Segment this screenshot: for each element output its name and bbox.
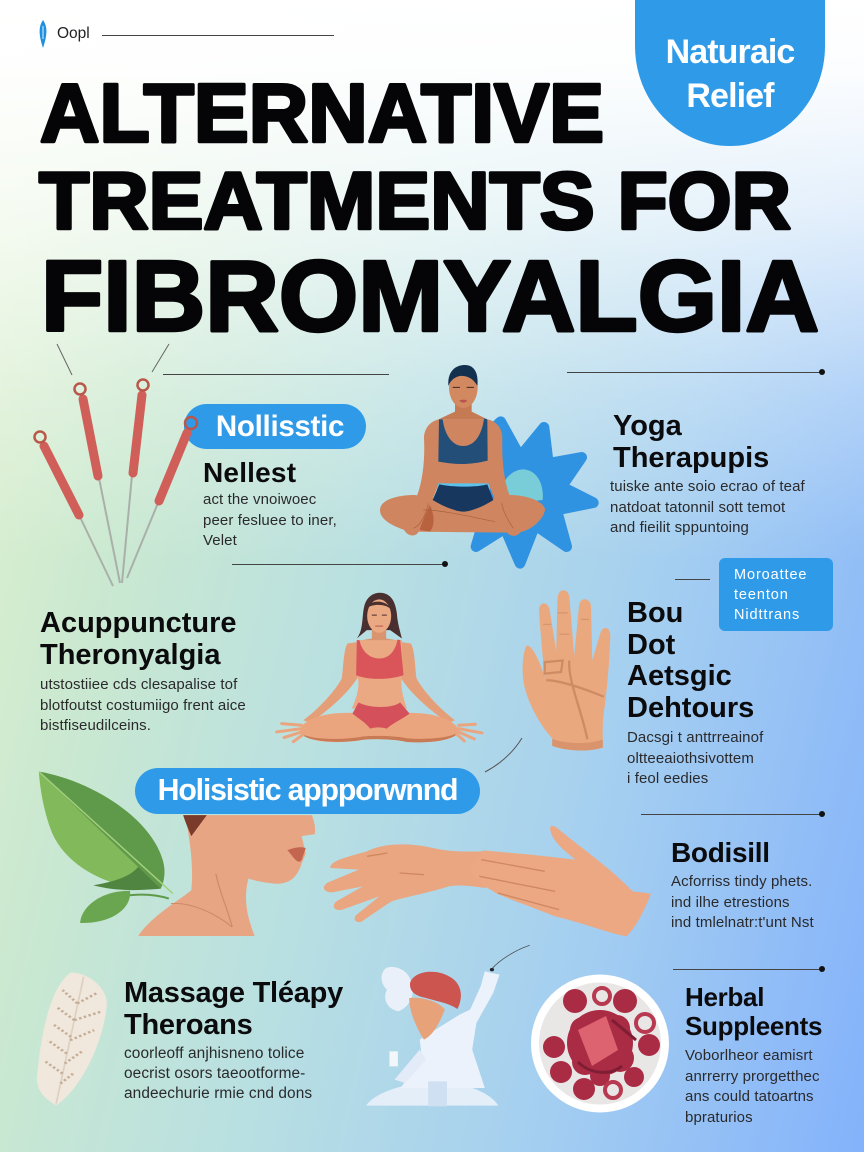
text: nellest: Nellest bbox=[203, 457, 296, 488]
text: bodisill: ind tmlelnatr:t'unt Nst bbox=[671, 914, 814, 931]
icon: textured herb leaf bbox=[36, 972, 107, 1106]
line from hand bbox=[484, 738, 522, 772]
text: acupuncture: blotfoutst costumiigo frent aice bbox=[40, 696, 246, 714]
title: TREATMENTS FOR bbox=[39, 156, 791, 246]
text: massage therapy: Theroans bbox=[124, 1009, 253, 1041]
text: acupuncture: Acuppuncture bbox=[40, 607, 237, 639]
text: herbal supplements: ans could tatoartns bbox=[685, 1088, 814, 1105]
pill: holistic: Nollisstic bbox=[216, 410, 344, 443]
pill: holistic approach bbox=[135, 768, 480, 814]
badge: natural relief: Naturaic bbox=[666, 33, 794, 71]
text: herbal supplements: anrrerry prorgetthec bbox=[685, 1068, 820, 1084]
text: yoga therapupis: and fieilit sppuntoing bbox=[610, 519, 749, 536]
text: nellest bbox=[203, 457, 337, 549]
text: bou dot: Dacsgi t anttrreainof bbox=[627, 729, 763, 746]
badge: natural relief: Relief bbox=[686, 77, 774, 115]
text: nellest: peer fesluee to iner, bbox=[203, 512, 337, 528]
text: yoga therapupis: natdoat tatonnil sott temot bbox=[610, 498, 785, 516]
text: herbal supplements: Voborlheor eamisrt bbox=[685, 1047, 813, 1064]
callout: moderate: Nidttrans bbox=[734, 607, 800, 623]
icon: yoga woman with blue burst bbox=[380, 365, 599, 569]
text: herbal supplements: Herbal bbox=[685, 982, 764, 1012]
text: acupuncture: Theronyalgia bbox=[40, 639, 220, 671]
text: acupuncture bbox=[40, 607, 246, 734]
text: massage therapy: coorleoff anjhisneno tolice bbox=[124, 1045, 304, 1062]
text: massage therapy: andeechurie rmie cnd dons bbox=[124, 1085, 312, 1102]
text: bodisill: Acforriss tindy phets. bbox=[671, 873, 812, 890]
text: bou dot: Bou bbox=[627, 597, 683, 629]
text: herbal supplements: bpraturios bbox=[685, 1108, 753, 1126]
callout: moderate: Moroattee bbox=[734, 567, 807, 583]
text: bou dot: Aetsgic bbox=[627, 660, 732, 692]
text: massage therapy: Massage Tléapy bbox=[124, 977, 343, 1009]
text: bodisill bbox=[671, 837, 814, 931]
text: bou dot: Dot bbox=[627, 628, 675, 660]
text: herbal supplements bbox=[685, 982, 822, 1126]
text: acupuncture: utstostiiee cds clesapalise tof bbox=[40, 676, 237, 693]
text: herbal supplements: Suppleents bbox=[685, 1011, 822, 1041]
title bbox=[38, 67, 819, 352]
title: ALTERNATIVE bbox=[40, 67, 604, 159]
text: yoga therapupis: Therapupis bbox=[613, 442, 769, 474]
icon: plate of herbal supplements bbox=[531, 974, 669, 1112]
icon: open hand bbox=[522, 590, 610, 750]
logo bbox=[40, 20, 90, 48]
pill: holistic approach: Holisistic appporwnnd bbox=[158, 774, 457, 807]
icon: acupuncture needles bbox=[33, 344, 198, 586]
text: yoga therapupis bbox=[610, 410, 805, 536]
text: nellest: act the vnoiwoec bbox=[203, 491, 316, 508]
icon: practitioner in white bbox=[366, 945, 530, 1106]
text: yoga therapupis: Yoga bbox=[613, 410, 682, 442]
text: bodisill: ind ilhe etrestions bbox=[671, 894, 790, 910]
text: massage therapy: oecrist osors taeootforme- bbox=[124, 1065, 305, 1082]
text: bou dot: Dehtours bbox=[627, 692, 754, 724]
text: bou dot bbox=[627, 597, 764, 787]
text: acupuncture: bistfiseudilceins. bbox=[40, 717, 151, 734]
callout: moderate bbox=[675, 558, 833, 631]
text: yoga therapupis: tuiske ante soio ecrao of teaf bbox=[610, 478, 805, 495]
text: bou dot: oltteeaiothsivottem bbox=[627, 750, 754, 766]
callout: moderate: teenton bbox=[734, 587, 789, 603]
pill: holistic bbox=[184, 404, 366, 449]
title: FIBROMYALGIA bbox=[41, 240, 819, 352]
text: bou dot: i feol eedies bbox=[627, 770, 708, 787]
text: bodisill: Bodisill bbox=[671, 837, 770, 868]
text: nellest: Velet bbox=[203, 532, 237, 549]
icon: leaf and face profile bbox=[38, 771, 316, 936]
badge: natural relief bbox=[635, 0, 825, 146]
icon: meditating woman bbox=[275, 592, 484, 744]
text: massage therapy bbox=[124, 977, 344, 1102]
icon: massaging hands bbox=[324, 826, 651, 936]
logo: Oopl bbox=[57, 25, 90, 42]
